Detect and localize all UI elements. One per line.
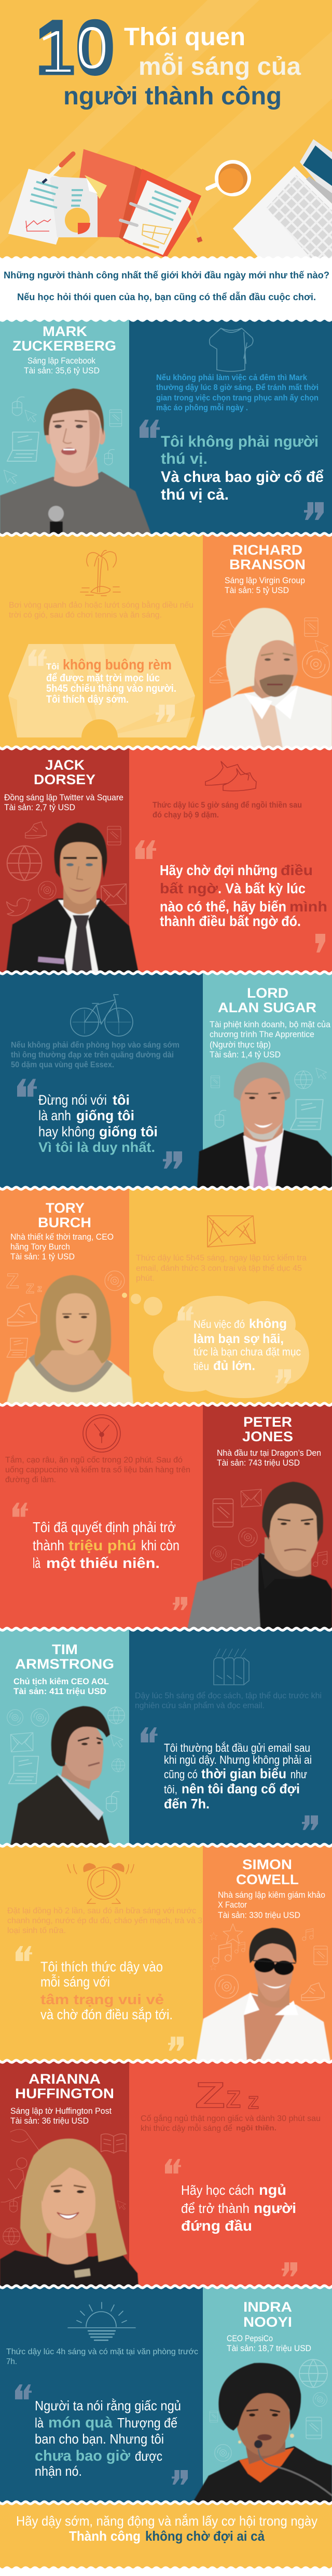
illustration: documents and folder — [8, 149, 202, 258]
icon: t-shirt — [210, 328, 253, 371]
name: BRANSON — [229, 557, 306, 572]
role and wealth: Tài sản: 1,4 tỷ USD — [210, 1050, 281, 1059]
quote: Đừng nói với — [38, 1092, 107, 1108]
quote — [46, 656, 176, 705]
habit text: loại sinh tố nữa. — [7, 1926, 66, 1935]
habit text: Thức dậy lúc 4h sáng và có mặt tại văn phòng trước — [6, 2347, 198, 2356]
panel: Simon Cowell — [0, 1845, 332, 2061]
quote — [33, 1519, 179, 1571]
quote: một thiếu niên. — [46, 1555, 160, 1571]
quote: chưa bao giờ — [35, 2448, 130, 2464]
quote: tiêu — [193, 1361, 209, 1373]
quote: cũng có — [164, 1768, 198, 1781]
role and wealth: Sáng lập Virgin Group — [225, 576, 305, 585]
quote: ngủ — [259, 2182, 286, 2198]
habit text: thường dậy lúc 8 giờ sáng. Để tránh mất thời — [156, 383, 319, 392]
quote: thú vị. — [161, 450, 208, 467]
doodles — [7, 1271, 125, 1357]
habit text: Thức dậy lúc 5 giờ sáng để ngồi thiền sau — [153, 801, 302, 810]
habit text — [6, 2347, 198, 2366]
name — [12, 324, 116, 354]
doodle: meditation and hand — [1, 2129, 39, 2202]
panel: Arianna Huffington — [0, 2061, 332, 2287]
name: JACK — [45, 757, 85, 773]
quote marks — [29, 650, 175, 722]
icon: zzz: Z — [226, 2086, 241, 2113]
quote — [161, 433, 324, 503]
habit text — [141, 2113, 321, 2133]
icon: envelope — [208, 1216, 255, 1247]
doodles — [3, 2134, 126, 2245]
quote: tức là bạn chưa đặt mục — [193, 1346, 301, 1358]
habit text — [153, 801, 302, 820]
habit text: uống cappuccino và kiểm tra số liệu bán hàng trên — [5, 1465, 190, 1474]
portrait: Burch — [6, 1275, 133, 1404]
habit text: Thức dậy lúc 5h45 sáng, ngay lập tức kiểm tra — [136, 1253, 307, 1263]
name: HUFFINGTON — [15, 2086, 114, 2101]
intro panel: Những người thành công nhất thế giới khởi đầu ngày mới như thế nào? — [4, 270, 329, 280]
quote — [40, 1959, 173, 2022]
quote: Tôi — [46, 662, 59, 672]
zzz doodle — [6, 1270, 42, 1296]
quote — [164, 1741, 312, 1812]
quote: và chờ đón điều sắp tới. — [40, 2006, 173, 2022]
habit text: gian trong việc chọn trang phục anh ấy chọn — [156, 394, 319, 403]
role and wealth: Sáng lập Facebook — [27, 356, 96, 366]
quote: thú vị cả. — [161, 486, 229, 503]
quote: Thượng đế — [117, 2415, 177, 2431]
role and wealth: Nhà sáng lập kiêm giám khảo — [218, 1890, 325, 1900]
quote: khi ngủ dậy. Nhưng không phải ai — [164, 1753, 312, 1766]
quote: 5h45 chiếu thẳng vào người. — [46, 682, 176, 694]
role and wealth: Tài sản: 36 triệu USD — [10, 2116, 89, 2126]
role and wealth — [227, 2334, 311, 2353]
quote: thời gian biểu — [201, 1766, 286, 1781]
portrait: Zuckerberg — [0, 388, 151, 535]
quote: đến 7h. — [164, 1796, 210, 1812]
name: ARIANNA — [29, 2071, 101, 2087]
quote: là — [33, 1555, 40, 1571]
name — [218, 985, 316, 1015]
portrait: Cowell — [196, 1928, 330, 2061]
quote: đủ lớn. — [213, 1359, 255, 1373]
icon: books — [214, 1649, 249, 1685]
habit text: 50 dặm qua vùng quê Essex. — [11, 1061, 114, 1069]
habit text — [5, 1455, 190, 1484]
quote: không buông rèm — [63, 656, 172, 673]
habit text: đường đi làm. — [5, 1475, 56, 1484]
role and wealth: Sáng lập tờ Huffington Post — [10, 2107, 112, 2116]
footer panel: Thành công — [69, 2528, 141, 2544]
quote marks — [16, 1946, 184, 2050]
panel: Indra Nooyi — [0, 2287, 332, 2503]
quote: Hãy chờ đợi những — [160, 862, 278, 878]
role and wealth — [10, 1232, 114, 1262]
illustration: laptop — [233, 139, 332, 259]
habit text: ngồi thiền. — [236, 2124, 276, 2132]
quote: món quà — [48, 2414, 113, 2431]
quote: người — [254, 2200, 296, 2216]
quote: làm bạn sợ hãi, — [193, 1332, 284, 1346]
quote: mình — [289, 898, 327, 915]
role and wealth: chương trình The Apprentice — [210, 1030, 314, 1039]
quote: mỗi sáng với — [40, 1974, 110, 1990]
quote: Tôi thường bắt đầu gửi email sau — [164, 1741, 310, 1754]
quote marks — [135, 840, 325, 952]
quote: . Và bất kỳ lúc — [218, 880, 306, 896]
icon: clock — [83, 1415, 120, 1452]
role and wealth: Chủ tịch kiêm CEO AOL — [13, 1677, 109, 1686]
doodles — [210, 618, 329, 683]
portrait: Huffington — [0, 2139, 139, 2287]
quote: để được mặt trời mọc lúc — [46, 673, 160, 684]
role and wealth — [210, 1020, 331, 1059]
role and wealth: Đồng sáng lập Twitter và Square — [4, 793, 123, 802]
quote: giống tôi — [99, 1124, 158, 1139]
sunrise curtain shape — [8, 644, 195, 737]
habit text: phút. — [136, 1274, 155, 1283]
name: BURCH — [38, 1215, 91, 1230]
role and wealth — [13, 1677, 109, 1696]
role and wealth: Tài sản: 1 tỷ USD — [10, 1252, 75, 1262]
doodles — [211, 1490, 327, 1576]
big number 10: 10 — [35, 4, 115, 91]
role and wealth: Tài sản: 411 triệu USD — [13, 1687, 106, 1696]
quote marks — [141, 1727, 318, 1830]
panel: Mark Zuckerberg — [0, 319, 332, 535]
quote marks — [140, 420, 324, 520]
quote — [181, 2182, 296, 2234]
icon: zzz: Z — [248, 2093, 259, 2113]
icon: zzz — [195, 2075, 259, 2115]
role and wealth: Tài phiệt kinh doanh, bộ mặt của — [210, 1020, 331, 1029]
name: TORY — [46, 1200, 85, 1216]
role and wealth: CEO PepsiCo — [227, 2334, 273, 2343]
habit text: 7h. — [6, 2357, 17, 2366]
quote: như — [290, 1768, 307, 1781]
panel: Jack Dorsey — [0, 748, 332, 973]
quote: tôi — [113, 1092, 130, 1108]
footer panel: không chờ đợi ai cả — [145, 2528, 265, 2544]
habit text — [156, 373, 319, 412]
quote: thành điều bất ngờ đó. — [160, 913, 301, 929]
name — [34, 757, 95, 787]
name: LORD — [247, 985, 288, 1001]
zzz doodle: z — [37, 1283, 42, 1294]
role and wealth: Nhà thiết kế thời trang, CEO — [10, 1232, 114, 1242]
quote: để trở thành — [181, 2201, 250, 2216]
quote marks — [165, 2159, 297, 2276]
quote: khi còn — [141, 1537, 179, 1553]
quote: Tôi thích thức dậy vào — [40, 1959, 163, 1975]
role and wealth — [24, 356, 100, 375]
quote marks — [17, 1079, 182, 1169]
portrait: Dorsey — [6, 823, 139, 973]
quote: bất ngờ — [160, 880, 218, 896]
quote: nên tôi đang cố đợi — [182, 1781, 300, 1796]
doodles — [211, 1068, 327, 1130]
habit text: thì ông thường đạp xe trên quãng đường dài — [11, 1051, 174, 1059]
habit text — [136, 1253, 307, 1283]
quote: tôi, — [164, 1783, 177, 1796]
name: SIMON — [242, 1857, 292, 1872]
name: PETER — [243, 1414, 292, 1430]
quote: nào có thể, hãy biến — [160, 898, 286, 915]
doodles — [7, 822, 126, 916]
title: người thành công — [63, 83, 282, 110]
quote: Vì tôi là duy nhất. — [38, 1139, 155, 1155]
name — [15, 2071, 114, 2101]
quote: thành — [33, 1537, 64, 1553]
habit text — [135, 1691, 322, 1710]
role and wealth — [217, 1448, 321, 1468]
habit text: chanh nóng, nước ép đu đủ, cháo yến mạch, trà và 3 — [7, 1916, 202, 1925]
habit text: đó chạy bộ 9 dặm. — [153, 811, 219, 820]
quote: Người ta nói rằng giấc ngủ — [35, 2398, 181, 2413]
footer panel — [0, 2503, 332, 2569]
icon: sunrise — [68, 2302, 135, 2340]
quote: Và chưa bao giờ cố để — [161, 468, 324, 486]
name — [243, 2299, 292, 2330]
role and wealth: hãng Tory Burch — [10, 1242, 70, 1252]
panel: Peter Jones — [0, 1404, 332, 1629]
quote — [38, 1092, 158, 1155]
portrait: Armstrong — [10, 1706, 110, 1845]
habit text: khi thức dậy mỗi sáng để — [141, 2123, 232, 2133]
quote: được — [135, 2448, 162, 2464]
title: mỗi sáng của — [139, 52, 301, 81]
habit text: email, đánh thức 3 con trai và tập thể dục 45 — [136, 1264, 302, 1273]
name — [229, 542, 306, 572]
zzz doodle: Z — [26, 1281, 34, 1296]
quote: Tôi không phải người — [161, 433, 319, 450]
icon: bicycle — [71, 995, 133, 1036]
panel: Tim Armstrong — [0, 1629, 332, 1845]
role and wealth — [225, 576, 305, 595]
habit text: Cố gắng ngủ thật ngon giấc và dành 30 phút sau — [141, 2113, 321, 2123]
quote: Tôi thích dậy sớm. — [46, 694, 129, 705]
name: JONES — [242, 1429, 293, 1444]
quote: Tôi đã quyết định phải trở — [33, 1519, 176, 1535]
name: ARMSTRONG — [15, 1656, 114, 1672]
habit text: Nếu không phải làm việc cả đêm thì Mark — [156, 373, 307, 382]
habit text: Tắm, cạo râu, ăn ngũ cốc trong 20 phút. Sau đó — [5, 1455, 183, 1465]
doodles — [7, 1707, 125, 1812]
quote: là anh — [38, 1108, 71, 1123]
thought bubble — [122, 1293, 309, 1398]
quote — [193, 1317, 301, 1373]
icon: palm island — [80, 551, 120, 596]
role and wealth: Tài sản: 330 triệu USD — [218, 1911, 300, 1920]
quote: triệu phú — [68, 1537, 136, 1553]
title — [63, 23, 301, 110]
name — [242, 1414, 293, 1444]
doodles — [210, 2359, 327, 2461]
name — [38, 1200, 91, 1230]
panel: Lord Alan Sugar — [0, 973, 332, 1188]
name — [15, 1642, 114, 1672]
doodles — [4, 397, 122, 484]
habit text: Nếu không phải đến phòng họp vào sáng sớm — [11, 1041, 179, 1050]
role and wealth — [10, 2107, 112, 2126]
quote: hay không — [38, 1124, 95, 1139]
name: INDRA — [243, 2299, 292, 2315]
quote — [160, 862, 327, 929]
portrait: Jones — [187, 1482, 332, 1629]
role and wealth — [218, 1890, 325, 1920]
name: NOOYI — [243, 2314, 292, 2330]
quote: nhận nó. — [35, 2463, 82, 2479]
name: ALAN SUGAR — [218, 1000, 316, 1015]
habit text: Bơi vòng quanh đảo hoặc lướt sóng bằng diều nếu — [9, 600, 193, 610]
panel: Richard Branson — [0, 535, 332, 748]
name: ZUCKERBERG — [12, 338, 116, 354]
quote: là — [35, 2415, 44, 2431]
habit text: Dậy lúc 5h sáng để đọc sách, tập thể dục trước khi — [135, 1691, 322, 1700]
name: TIM — [52, 1642, 78, 1657]
habit text — [7, 1907, 202, 1935]
habit text: trời có gió, sau đó chơi tennis và ăn sáng. — [9, 611, 162, 620]
role and wealth: Tài sản: 35,6 tỷ USD — [24, 366, 100, 375]
role and wealth: Tài sản: 18,7 triệu USD — [227, 2344, 311, 2353]
role and wealth: (Người thực tập) — [210, 1040, 271, 1050]
doodles — [210, 1924, 327, 2001]
quote marks — [178, 1307, 291, 1384]
quote: không — [249, 1317, 287, 1331]
zzz doodle: Z — [6, 1270, 19, 1293]
intro panel — [0, 259, 332, 320]
role and wealth: Tài sản: 743 triệu USD — [217, 1458, 300, 1468]
name: RICHARD — [232, 542, 302, 558]
habit text: Đặt lại đồng hồ 2 lần, sau đó ăn bữa sáng với nước — [7, 1907, 196, 1915]
name — [236, 1857, 299, 1887]
portrait: Sugar — [197, 1062, 332, 1188]
name: DORSEY — [34, 772, 95, 787]
habit text: nghiên cứu sản phẩm và đọc email. — [135, 1701, 265, 1710]
portrait: Branson — [196, 608, 332, 748]
habit text — [11, 1041, 179, 1069]
header panel — [0, 0, 332, 259]
quote: ban cho bạn. Nhưng tôi — [35, 2431, 164, 2447]
quote: tâm trạng vui vẻ — [40, 1992, 164, 2007]
quote marks — [15, 2384, 188, 2485]
role and wealth: Tài sản: 5 tỷ USD — [225, 586, 289, 595]
icon: zzz: Z — [195, 2075, 225, 2115]
panel: Tory Burch — [0, 1188, 332, 1404]
icon: alarm clock — [67, 1863, 134, 1903]
quote: điều — [281, 862, 313, 878]
role and wealth: Nhà đầu tư tại Dragon’s Den — [217, 1448, 321, 1458]
quote: Hãy học cách — [181, 2182, 254, 2198]
quote: Nếu việc đó — [193, 1319, 245, 1331]
portrait: Nooyi — [192, 2363, 332, 2503]
illustration: coffee cup — [208, 160, 251, 196]
quote: giống tôi — [76, 1108, 134, 1123]
habit text: mặc áo phông mỗi ngày . — [156, 404, 248, 412]
role and wealth: X Factor — [218, 1900, 247, 1910]
role and wealth — [4, 793, 123, 812]
habit text — [9, 600, 193, 620]
quote marks — [12, 1503, 187, 1610]
title: Thói quen — [124, 23, 245, 51]
role and wealth: Tài sản: 2,7 tỷ USD — [4, 803, 75, 812]
name: MARK — [43, 324, 88, 339]
quote — [35, 2398, 181, 2479]
icon: sneakers — [205, 761, 256, 791]
name: COWELL — [236, 1872, 299, 1887]
quote: đứng đầu — [181, 2218, 252, 2234]
intro panel: Nếu học hỏi thói quen của họ, bạn cũng có thể dẫn đầu cuộc chơi. — [17, 291, 316, 302]
